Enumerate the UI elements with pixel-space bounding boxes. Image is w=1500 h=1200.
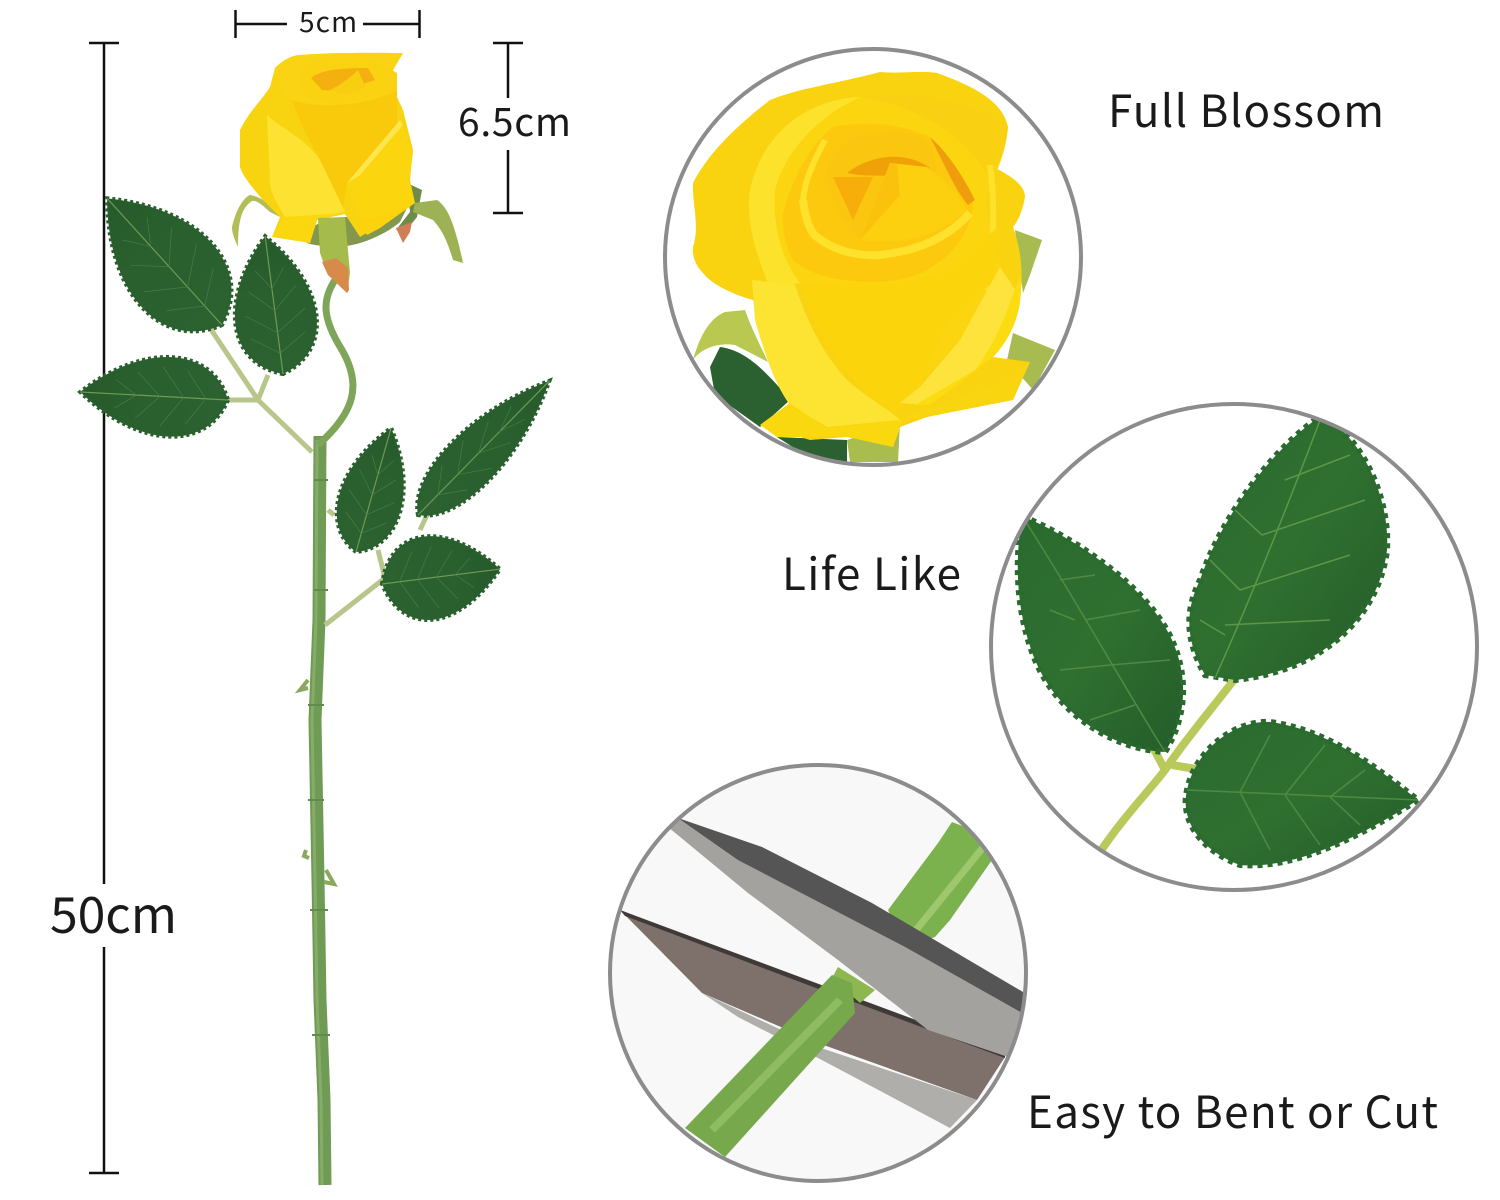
core spiral bbox=[827, 132, 940, 240]
lower right leaf bbox=[1186, 722, 1418, 865]
leaf 3 bbox=[78, 352, 230, 440]
lower stem bbox=[685, 975, 855, 1157]
upper blade back bbox=[678, 818, 1023, 1013]
lower blade bbox=[620, 910, 1005, 1100]
front petal bbox=[982, 228, 996, 290]
bottom petal flare bbox=[760, 403, 903, 447]
right front petal bbox=[900, 267, 1020, 405]
bud height dimension: 6.5cm bbox=[458, 43, 571, 213]
leaf 6 bbox=[377, 528, 505, 625]
leaf 4 bbox=[399, 362, 568, 534]
inner rim bbox=[803, 200, 970, 255]
upper blade face bbox=[668, 818, 1022, 1057]
left light petal bbox=[267, 115, 345, 220]
leaf 1 bbox=[72, 166, 257, 357]
heading: Life Like: Life Like bbox=[782, 539, 961, 603]
center sepal bbox=[318, 217, 350, 293]
height dimension: 50cm bbox=[50, 43, 177, 1173]
width dimension: 5cm bbox=[235, 1, 420, 41]
leaf stem bbox=[1100, 672, 1240, 852]
upper stem bbox=[888, 822, 992, 947]
panel: full blossom close-up bbox=[660, 45, 1090, 470]
circle border bbox=[991, 404, 1477, 890]
back petals bbox=[693, 72, 1030, 447]
second shell bbox=[996, 128, 1008, 170]
bud body bbox=[240, 53, 415, 243]
lower blade silver edge bbox=[702, 993, 977, 1128]
label: 6.5cm: 6.5cm bbox=[458, 92, 571, 148]
inner shell bbox=[783, 124, 973, 282]
top spiral bbox=[302, 58, 397, 103]
stem bbox=[208, 280, 427, 1185]
rose close-up photo bbox=[692, 72, 1055, 462]
heading: Full Blossom: Full Blossom bbox=[1108, 76, 1384, 140]
right petal bbox=[347, 120, 415, 233]
calyx bbox=[305, 208, 407, 246]
panel: life like leaves close-up bbox=[990, 403, 1480, 893]
leaf 5 bbox=[326, 419, 422, 561]
leaves close-up photo bbox=[1014, 418, 1419, 868]
label: 50cm: 50cm bbox=[50, 876, 177, 948]
center petal bbox=[861, 163, 940, 240]
left sepal bbox=[232, 195, 280, 247]
circle border bbox=[665, 49, 1081, 465]
sepals and leaves bbox=[693, 230, 1055, 462]
scissors and stem photo bbox=[621, 819, 1023, 1157]
heading: Easy to Bent or Cut: Easy to Bent or Cut bbox=[1027, 1077, 1438, 1141]
stem neck bbox=[832, 967, 875, 1003]
upper right leaf bbox=[1189, 415, 1387, 680]
circle border bbox=[610, 765, 1026, 1181]
rose bud bbox=[232, 53, 463, 293]
left front wrap bbox=[752, 280, 900, 427]
full rose stem illustration bbox=[72, 53, 568, 1185]
center petal bbox=[292, 90, 397, 207]
left leaf bbox=[1018, 516, 1183, 752]
label: 5cm: 5cm bbox=[299, 1, 357, 41]
small right leaflet bbox=[396, 183, 422, 232]
leaf 2 bbox=[225, 231, 323, 379]
panel: easy to cut close-up bbox=[608, 763, 1028, 1183]
right sepal bbox=[413, 200, 463, 263]
